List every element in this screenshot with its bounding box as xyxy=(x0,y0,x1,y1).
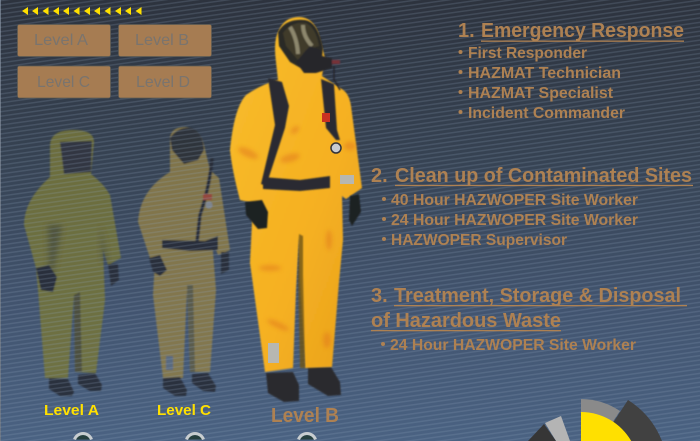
section 2: Clean up of Contaminated Sites: HAZWOPER Supervisor xyxy=(391,232,567,249)
suit stains xyxy=(236,124,356,348)
section 1: Emergency Response: Emergency Response xyxy=(481,20,684,42)
boots xyxy=(266,367,341,402)
suit body xyxy=(230,17,362,372)
section 1: Emergency Response: 1. xyxy=(458,20,475,42)
arrow row xyxy=(22,7,142,15)
pressure gauge xyxy=(331,143,341,153)
chest logo xyxy=(322,113,330,122)
section 1: Emergency Response: HAZMAT Technician xyxy=(468,65,621,82)
figure: Level C suit xyxy=(138,127,230,396)
gloves xyxy=(245,194,361,229)
button: Level D xyxy=(118,66,212,98)
section 1: Emergency Response: Incident Commander xyxy=(468,105,625,122)
section 3: Treatment, Storage and Disposal: 24 Hour HAZWOPER Site Worker xyxy=(390,337,636,354)
button: Level D: Level D xyxy=(136,74,190,91)
button: Level C xyxy=(18,66,110,98)
section 3: Treatment, Storage and Disposal: Treatment, Storage & Disposal xyxy=(394,285,681,307)
radial gauge xyxy=(528,399,662,441)
button: Level B: Level B xyxy=(135,32,189,49)
button: Level C: Level C xyxy=(37,74,90,91)
section 3: Treatment, Storage and Disposal xyxy=(371,285,687,354)
leg shadow xyxy=(298,234,305,368)
section 2: Clean up of Contaminated Sites: 24 Hour HAZWOPER Site Worker xyxy=(391,212,638,229)
section 2: Clean up of Contaminated Sites xyxy=(371,165,693,249)
label: Level C: Level C xyxy=(157,402,211,419)
button: Level A: Level A xyxy=(34,32,88,49)
section 2: Clean up of Contaminated Sites: 40 Hour HAZWOPER Site Worker xyxy=(391,192,638,209)
section 3: Treatment, Storage and Disposal: 3. xyxy=(371,285,388,307)
figure: Level B suit (main) xyxy=(230,17,362,402)
section 1: Emergency Response: HAZMAT Specialist xyxy=(468,85,614,102)
section 1: Emergency Response: First Responder xyxy=(468,45,587,62)
section 3: Treatment, Storage and Disposal: of Hazardous Waste xyxy=(371,310,561,332)
figure: Level A suit xyxy=(24,130,121,396)
selector dots xyxy=(74,433,316,440)
section 1: Emergency Response xyxy=(458,20,684,122)
label: Level B: Level B xyxy=(271,405,339,427)
section 2: Clean up of Contaminated Sites: 2. xyxy=(371,165,388,187)
visor and respirator xyxy=(278,20,340,90)
button: Level B xyxy=(118,24,212,56)
harness straps and belt xyxy=(261,78,340,191)
button: Level A xyxy=(18,24,110,56)
section 2: Clean up of Contaminated Sites: Clean up of Contaminated Sites xyxy=(395,165,692,187)
sleeve and leg labels xyxy=(268,175,354,363)
label: Level A: Level A xyxy=(44,402,99,419)
